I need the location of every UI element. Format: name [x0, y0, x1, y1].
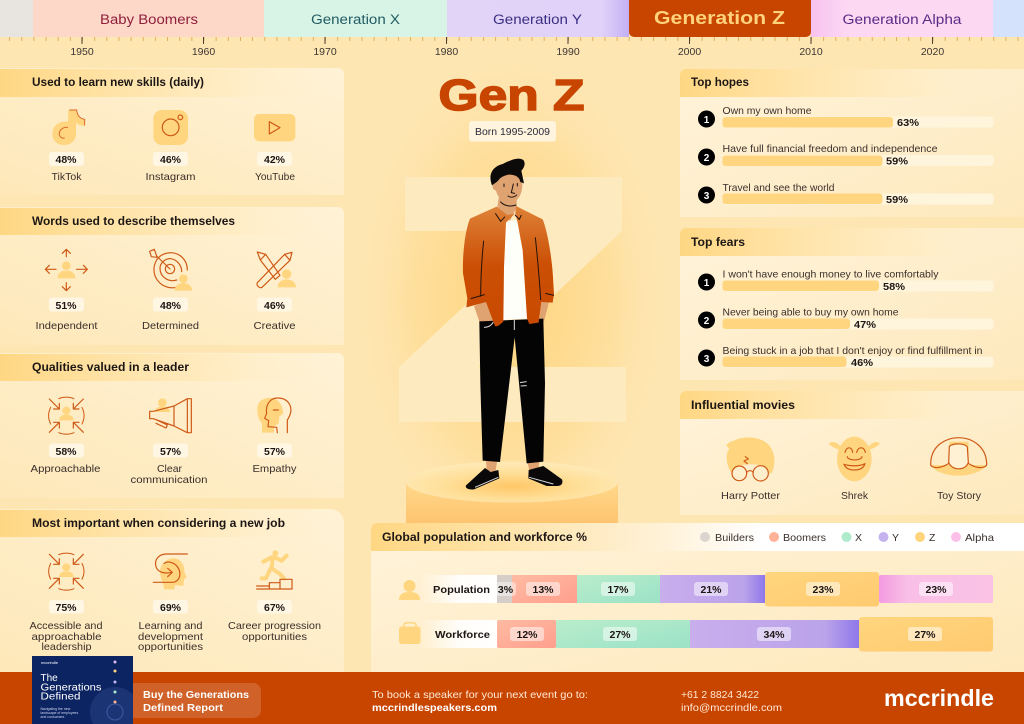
- Generation Z tab: Generation Z: [654, 8, 785, 28]
- panel: influential movies: Harry Potter: [721, 490, 781, 502]
- icon: Shrek: [829, 437, 880, 481]
- panel: influential movies: Toy Story: [937, 490, 982, 502]
- row: population: 23%: [925, 584, 947, 596]
- stat: independent: 51%: [55, 300, 77, 312]
- icon: independent person with arrows: [45, 249, 87, 291]
- timeline ticks and year labels: 1960: [192, 46, 215, 58]
- stat: empathy: Empathy: [252, 463, 297, 475]
- row: population: 21%: [700, 584, 722, 596]
- stat: career progression: [228, 600, 321, 643]
- buy report button: Buy the Generations: [143, 689, 249, 701]
- hope 1: Own my own home: [722, 105, 812, 117]
- stat: accessible leadership: 75%: [55, 602, 77, 614]
- heading: Words used to describe themselves: [32, 214, 235, 228]
- row: population: 3%: [498, 584, 514, 596]
- stat: clear communication: [130, 444, 208, 486]
- buy report button: [133, 683, 261, 718]
- stat: career progression: 67%: [264, 602, 286, 614]
- heading: Influential movies: [691, 398, 795, 412]
- panel: most important when considering a new job: [0, 509, 344, 672]
- icon: accessible leadership: [49, 553, 84, 590]
- contact details: +61 2 8824 3422: [681, 689, 759, 701]
- panel: words used to describe themselves: [0, 207, 344, 345]
- row: population: 17%: [607, 584, 629, 596]
- fear 2: 2: [704, 316, 710, 327]
- stat: empathy: 57%: [264, 446, 286, 458]
- buy report button: Defined Report: [143, 702, 224, 714]
- stat: approachable: [30, 444, 101, 475]
- central glow: [347, 40, 677, 560]
- row: population: [399, 572, 993, 606]
- stat: YouTube: [255, 152, 295, 183]
- hope 2: 59%: [886, 156, 909, 168]
- title: Gen Z: [438, 71, 584, 120]
- row: workforce: 34%: [763, 629, 785, 641]
- stat: TikTok: TikTok: [52, 171, 82, 183]
- stat: independent: Independent: [36, 320, 98, 332]
- generation timeline band: [0, 0, 1024, 37]
- stat: TikTok: [49, 152, 84, 183]
- stat: career progression: Career progression: [228, 620, 321, 632]
- stat: learning and development: development: [138, 631, 203, 643]
- heading: Qualities valued in a leader: [32, 360, 189, 374]
- heading: Top hopes: [691, 75, 749, 89]
- hope 3: 3: [704, 191, 710, 202]
- book cover: [32, 656, 140, 724]
- stat: determined: 48%: [160, 300, 182, 312]
- stat: approachable: 58%: [55, 446, 77, 458]
- stat: creative: Creative: [254, 320, 296, 332]
- generation timeline band: Generation Y: [493, 12, 582, 27]
- podium: [406, 462, 618, 523]
- stat: learning and development: opportunities: [138, 641, 203, 653]
- book cover: and consumers: [40, 715, 65, 719]
- icon: crossed pencils: [257, 252, 296, 288]
- trousers: [479, 319, 545, 463]
- contact details: [681, 689, 782, 714]
- speaker booking text: To book a speaker for your next event go to:: [372, 689, 588, 701]
- stat: TikTok: 48%: [55, 154, 77, 166]
- stat: Instagram: Instagram: [146, 171, 196, 183]
- legend: Boomers: [783, 532, 826, 544]
- stat: empathy: [252, 444, 297, 475]
- fear 1: [698, 268, 994, 293]
- panel: top fears: [680, 228, 1024, 380]
- stat: creative: [254, 298, 296, 332]
- hope 3: Travel and see the world: [722, 182, 835, 194]
- book cover: Navigating the new: [40, 707, 71, 711]
- row: workforce: 27%: [609, 629, 631, 641]
- legend: X: [855, 532, 862, 544]
- stat: Instagram: 46%: [160, 154, 182, 166]
- book cover: Defined: [40, 692, 80, 702]
- icon: head empathy: [257, 398, 291, 433]
- jacket lines: [471, 213, 554, 300]
- legend: Y: [892, 532, 899, 544]
- timeline ticks and year labels: 1970: [313, 46, 337, 58]
- background letter Z: [399, 177, 626, 422]
- stat: learning and development: [138, 600, 203, 653]
- heading: Top fears: [691, 235, 745, 249]
- footer band: [0, 656, 1024, 724]
- legend: Alpha: [965, 532, 994, 544]
- stat: clear communication: 57%: [160, 446, 182, 458]
- panel: qualities valued in a leader: [0, 353, 344, 498]
- row: population: 23%: [812, 584, 834, 596]
- timeline ticks and year labels: 1950: [70, 46, 94, 58]
- stat: career progression: opportunities: [242, 631, 307, 643]
- legend: Builders: [715, 532, 754, 544]
- logo: mccrindle: [884, 685, 994, 711]
- face details: [501, 183, 517, 206]
- birth year pill: [469, 121, 556, 142]
- hope 2: [698, 143, 994, 168]
- icon: approachable: [49, 397, 84, 434]
- icon: Toy Story: [931, 438, 987, 476]
- fear 1: I won't have enough money to live comfortably: [722, 268, 939, 280]
- fear 2: 47%: [854, 319, 877, 331]
- book cover: mccrindle: [41, 660, 59, 665]
- book cover: Generations: [40, 682, 102, 694]
- head: [493, 172, 522, 203]
- t-shirt: [503, 220, 527, 320]
- stat: YouTube: YouTube: [255, 171, 295, 183]
- panel: influential movies: [680, 391, 1024, 515]
- Generation Z tab: [629, 0, 811, 37]
- row: workforce: Workforce: [435, 629, 490, 641]
- fear 3: 3: [704, 354, 710, 365]
- fear 3: [698, 345, 994, 369]
- icon: megaphone: [150, 398, 191, 433]
- fear 1: 1: [704, 278, 710, 289]
- stat: clear communication: Clear: [157, 463, 183, 475]
- icon: Harry Potter: [726, 437, 774, 481]
- shoes: [466, 466, 562, 489]
- legend: Z: [929, 532, 936, 544]
- stat: accessible leadership: [30, 600, 103, 653]
- hope 1: 1: [704, 115, 710, 126]
- hands: [474, 301, 549, 323]
- stat: learning and development: 69%: [160, 602, 182, 614]
- illustration: young man standing: [463, 159, 562, 489]
- trouser details: [484, 320, 527, 386]
- book cover: landscape of employees: [40, 711, 78, 715]
- timeline ticks and year labels: 2000: [678, 46, 701, 58]
- hope 3: [698, 182, 994, 206]
- icon: YouTube: [254, 114, 295, 141]
- legend: [700, 532, 994, 544]
- heading: Most important when considering a new job: [32, 516, 285, 530]
- panel: influential movies: Shrek: [841, 490, 869, 502]
- panel: top hopes: [680, 69, 1024, 217]
- hope 2: Have full financial freedom and independence: [722, 143, 938, 155]
- stat: accessible leadership: leadership: [42, 641, 92, 653]
- generation timeline band: Baby Boomers: [100, 12, 198, 27]
- hair: [490, 159, 525, 185]
- row: workforce: 12%: [516, 629, 538, 641]
- timeline ticks and year labels: 1990: [556, 46, 580, 58]
- birth year pill: Born 1995-2009: [475, 126, 550, 138]
- timeline ticks and year labels: 1980: [435, 46, 458, 58]
- contact details: info@mccrindle.com: [681, 702, 782, 714]
- speaker booking text: mccrindlespeakers.com: [372, 702, 497, 714]
- timeline ticks and year labels: [0, 37, 1024, 58]
- stat: approachable: Approachable: [30, 463, 101, 475]
- hope 3: 59%: [886, 194, 909, 206]
- stat: clear communication: communication: [130, 474, 208, 486]
- stat: accessible leadership: Accessible and: [30, 620, 103, 632]
- icon: Instagram: [153, 110, 188, 145]
- fear 2: [698, 306, 994, 331]
- icon: target: [150, 249, 192, 291]
- shoe stripes: [475, 477, 553, 487]
- hope 1: [698, 105, 994, 129]
- fear 2: Never being able to buy my own home: [722, 306, 899, 318]
- hope 1: 63%: [897, 117, 920, 129]
- icon: briefcase: [399, 623, 420, 644]
- timeline ticks and year labels: 2020: [921, 46, 944, 58]
- icon: career progression: [257, 550, 292, 589]
- stat: independent: [36, 298, 98, 332]
- hope 2: 2: [704, 153, 710, 164]
- stat: accessible leadership: approachable: [32, 631, 102, 643]
- stat: determined: [142, 298, 199, 332]
- generation timeline band: Generation Alpha: [842, 12, 962, 27]
- generation timeline band: Generation X: [311, 12, 400, 27]
- fear 1: 58%: [883, 281, 906, 293]
- stat: learning and development: Learning and: [138, 620, 203, 632]
- heading: Used to learn new skills (daily): [32, 75, 204, 89]
- stat: determined: Determined: [142, 320, 199, 332]
- row: population: 13%: [532, 584, 554, 596]
- icon: TikTok: [52, 110, 85, 145]
- row: workforce: 27%: [914, 629, 936, 641]
- fear 3: 46%: [851, 357, 874, 369]
- jacket right: [515, 206, 554, 324]
- neck and ankles: [486, 193, 539, 473]
- row: population: Population: [433, 584, 490, 596]
- panel: used to learn new skills: [0, 68, 344, 195]
- stat: creative: 46%: [264, 300, 286, 312]
- heading: Global population and workforce %: [382, 530, 587, 544]
- timeline ticks and year labels: 2010: [799, 46, 823, 58]
- panel: global population and workforce: [371, 523, 1024, 672]
- jacket left: [463, 207, 515, 326]
- icon: person: [399, 580, 420, 600]
- row: workforce: [399, 617, 993, 652]
- stat: Instagram: [146, 152, 196, 183]
- fear 3: Being stuck in a job that I don't enjoy or find fulfillment in: [722, 345, 983, 357]
- icon: learning head: [153, 554, 187, 589]
- book cover: The: [40, 673, 58, 684]
- speaker booking text: [372, 689, 588, 714]
- stat: YouTube: 42%: [264, 154, 286, 166]
